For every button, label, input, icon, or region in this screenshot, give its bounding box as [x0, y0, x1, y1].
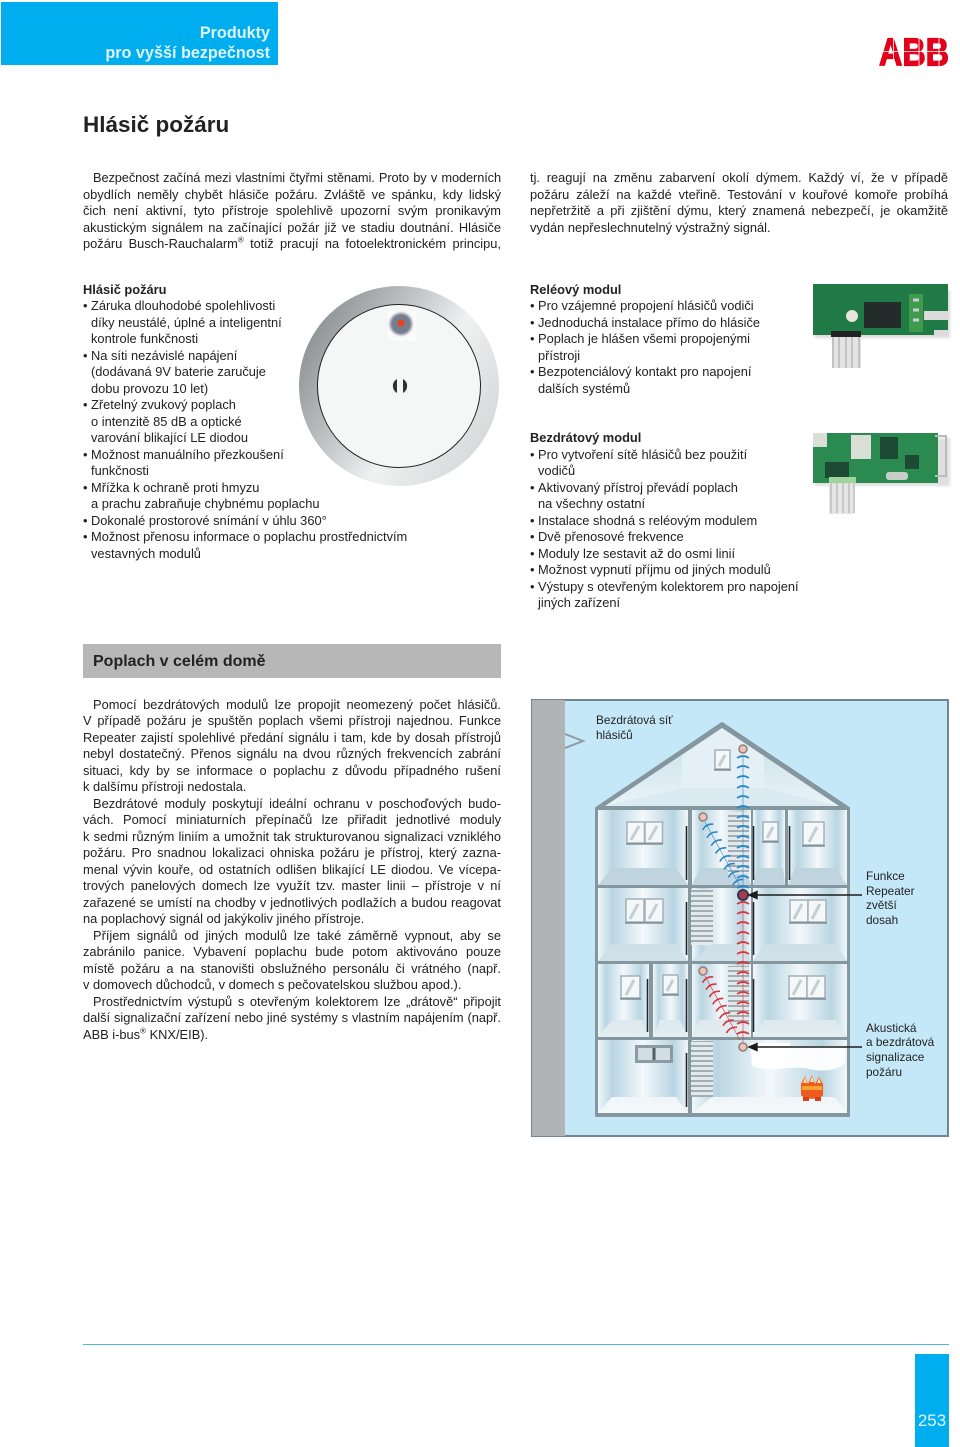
blue signal waves: [703, 756, 749, 890]
intro text right: požáru záleží na každé vteřině. Testování v kouřové komoře probíhá: [530, 186, 948, 202]
body text: zabránilo panice. Vybavení poplachu bude potom aktivováno pouze: [83, 944, 501, 959]
product list: Bezdrátový modul: Instalace shodná s reléovým modulem: [538, 512, 757, 528]
intro text right: tj. reagují na změnu zabarvení okolí dýmem. Každý ví, že v případě: [530, 170, 948, 185]
product list: Bezdrátový modul: Výstupy s otevřeným kolektorem pro napojení: [538, 578, 799, 594]
body text: vách. Pomocí miniaturních přepínačů lze přiřadit jednotlivé moduly: [83, 812, 501, 827]
product list: Hlásič požáru: Hlásič požáru: [83, 282, 167, 296]
product list: Hlásič požáru: funkčnosti: [91, 463, 149, 478]
product list: Bezdrátový modul: Moduly lze sestavit až do osmi linií: [538, 546, 735, 560]
label: network: [596, 713, 673, 742]
body text: na poplachový signál od jakýkoliv jiného přístroje.: [83, 911, 364, 926]
label: repeater: dosah: [866, 913, 898, 927]
footer line: [83, 1344, 949, 1345]
arrow: signalling: [749, 1044, 862, 1050]
smoke: [750, 1043, 845, 1070]
body text: místě požáru a na stanovišti obslužného personálu či vrátného (např.: [83, 960, 501, 976]
product list: Hlásič požáru: o intenzitě 85 dB a optické: [91, 414, 242, 428]
intro text left: čich není aktivní, tyto přístroje spolehlivě upozorní svým pronikavým: [83, 203, 501, 218]
product list: Bezdrátový modul: na všechny ostatní: [538, 496, 645, 511]
label: repeater: zvětší: [866, 898, 898, 912]
product list: Hlásič požáru: Mřížka k ochraně proti hmyzu: [91, 480, 259, 494]
product list: Hlásič požáru: (dodávaná 9V baterie zaručuje: [91, 364, 266, 379]
label: repeater: Repeater: [866, 884, 915, 898]
label: signalling: signalizace: [866, 1050, 925, 1064]
label: signalling: [866, 1021, 935, 1079]
house: [596, 723, 849, 1116]
product list: Reléový modul: přístroji: [538, 348, 580, 362]
icon: smoke detector photo: [299, 286, 499, 486]
label: signalling: a bezdrátová: [866, 1035, 935, 1049]
product list: Reléový modul: Reléový modul: [530, 282, 621, 296]
stairs: [691, 812, 749, 1097]
body text: zařazené se umístí na chodby v jednotlivých podlažích a budou reagovat: [83, 894, 501, 910]
product list: Reléový modul: dalších systémů: [538, 380, 630, 396]
product list: Reléový modul: Poplach je hlášen všemi propojenými: [538, 331, 750, 346]
header banner: Produkty: [200, 24, 270, 42]
body text: Prostřednictvím výstupů s otevřeným kolektorem lze „drátově“ připojit: [93, 994, 501, 1008]
product list: Bezdrátový modul: jiných zařízení: [538, 595, 620, 610]
product list: Hlásič požáru: kontrole funkčnosti: [91, 331, 198, 346]
product list: Hlásič požáru: Záruka dlouhodobé spolehlivosti: [91, 298, 275, 313]
diagram: house with wireless network: [531, 699, 949, 1137]
product list: Bezdrátový modul: [530, 430, 799, 610]
intro text left: akustickým signálem na začínající požár již ve stadiu doutnání. Hlásiče: [83, 220, 501, 234]
label: repeater: [866, 869, 915, 927]
intro text left: požáru Busch-Rauchalarm® totiž pracují na fotoelektronickém principu,: [83, 236, 501, 251]
doors: [648, 826, 790, 1107]
body text: V případě požáru je spuštěn poplach všemi přístroji najednou. Funkce: [83, 713, 501, 728]
body text: trových panelových domech lze využít tzv. master linii – přístroje v ní: [83, 878, 501, 893]
title: Hlásič požáru: [83, 112, 229, 137]
body text: Bezdrátové moduly poskytují ideální ochranu v poschoďových budo-: [93, 796, 501, 810]
intro text left: obydlích neměly chybět hlásiče požáru. Zvláště ve spánku, kdy lidský: [83, 186, 501, 202]
header banner: [1, 2, 278, 65]
product list: Hlásič požáru: Možnost manuálního přezkoušení: [91, 446, 284, 462]
intro text left: Bezpečnost začíná mezi vlastními čtyřmi stěnami. Proto by v moderních: [93, 170, 501, 185]
section heading bar: [83, 644, 501, 678]
body text: nebyl dostatečný. Přenos signálu na dvou různých frekvencích zabrání: [83, 746, 501, 761]
label: network: hlásičů: [596, 728, 633, 742]
product list: Reléový modul: Pro vzájemné propojení hlásičů vodiči: [538, 298, 754, 313]
label: signalling: Akustická: [866, 1021, 917, 1035]
page number: [915, 1354, 949, 1447]
product list: Bezdrátový modul: Bezdrátový modul: [530, 430, 641, 445]
body text: Pomocí bezdrátových modulů lze propojit neomezený počet hlásičů.: [93, 696, 501, 712]
body text: v domovech důchodců, v domech s pečovatelskou službou apod.).: [83, 977, 461, 992]
section heading bar: Poplach v celém domě: [93, 653, 266, 670]
product list: Hlásič požáru: Na síti nezávislé napájení: [91, 348, 237, 362]
intro text right: [530, 170, 948, 234]
body text: ABB i-bus® KNX/EIB).: [83, 1026, 208, 1042]
icon: wireless module photo: [813, 433, 951, 514]
body text: menal vývin kouře, od ostatních odlišen blikající LE diodou. Ve vícepa-: [83, 862, 501, 876]
product list: Hlásič požáru: [83, 282, 407, 560]
product list: Reléový modul: Jednoduchá instalace přímo do hlásiče: [538, 314, 760, 330]
intro text right: nepřetržitě a při zjištění dýmu, který znamená nebezpečí, je okamžitě: [530, 203, 948, 218]
product list: Bezdrátový modul: Pro vytvoření sítě hlásičů bez použití: [538, 446, 747, 462]
body text: Příjem signálů od jiných modulů lze také záměrně vypnout, aby se: [93, 928, 501, 942]
product list: Reléový modul: [530, 282, 760, 396]
product list: Hlásič požáru: dobu provozu 10 let): [91, 380, 208, 396]
product list: Bezdrátový modul: Možnost vypnutí příjmu od jiných modulů: [538, 562, 771, 577]
product list: Hlásič požáru: vestavných modulů: [91, 546, 201, 560]
product list: Bezdrátový modul: Aktivovaný přístroj převádí poplach: [538, 480, 738, 494]
label: signalling: požáru: [866, 1065, 902, 1079]
detectors: [699, 745, 748, 1051]
arrow: repeater: [749, 892, 862, 898]
product list: Reléový modul: Bezpotenciálový kontakt pro napojení: [538, 364, 752, 379]
product list: Hlásič požáru: varování blikající LE diodou: [91, 430, 248, 445]
fire: [801, 1075, 823, 1101]
vent window: [635, 1045, 673, 1063]
icon: relay module photo: [813, 284, 951, 368]
label: network: Bezdrátová síť: [596, 713, 673, 727]
body text: [83, 696, 501, 1042]
label: repeater: Funkce: [866, 869, 905, 883]
body text: k dalšímu přístroji nedostala.: [83, 779, 246, 794]
red signal waves: [703, 900, 749, 1042]
product list: Hlásič požáru: Dokonalé prostorové snímání v úhlu 360°: [91, 512, 327, 528]
body text: požáru. Pro snadnou lokalizaci ohniska požáru je přístroj, který zazna-: [83, 845, 501, 860]
product list: Bezdrátový modul: Dvě přenosové frekvence: [538, 529, 684, 544]
body text: situaci, kdy by se informace o poplachu z důvodu případného rušení: [83, 762, 501, 778]
header banner: pro vyšší bezpečnost: [105, 44, 270, 62]
windows: [620, 750, 827, 999]
intro text left: [83, 170, 501, 251]
product list: Hlásič požáru: a prachu zabraňuje chybnému poplachu: [91, 496, 320, 511]
product list: Hlásič požáru: Možnost přenosu informace o poplachu prostřednictvím: [91, 529, 407, 544]
body text: k sedmi různým liniím a umožnit tak strukturovanou signalizaci vzniklého: [83, 828, 501, 844]
background panel: [532, 700, 948, 1136]
body text: Repeater zajistí spolehlivé předání signálu i tam, kde by dosah přístrojů: [83, 730, 501, 744]
intro text right: vydán nepřeslechnutelný výstražný signál.: [530, 220, 771, 234]
gray side strip: [532, 700, 583, 1136]
product list: Hlásič požáru: Zřetelný zvukový poplach: [91, 397, 236, 412]
page number: 253: [918, 1411, 946, 1430]
product list: Hlásič požáru: díky neustálé, úplné a inteligentní: [91, 314, 282, 330]
body text: další signalizační zařízení nebo jiné systémy s vlastním napájením (např.: [83, 1010, 501, 1025]
product list: Bezdrátový modul: vodičů: [538, 463, 575, 478]
